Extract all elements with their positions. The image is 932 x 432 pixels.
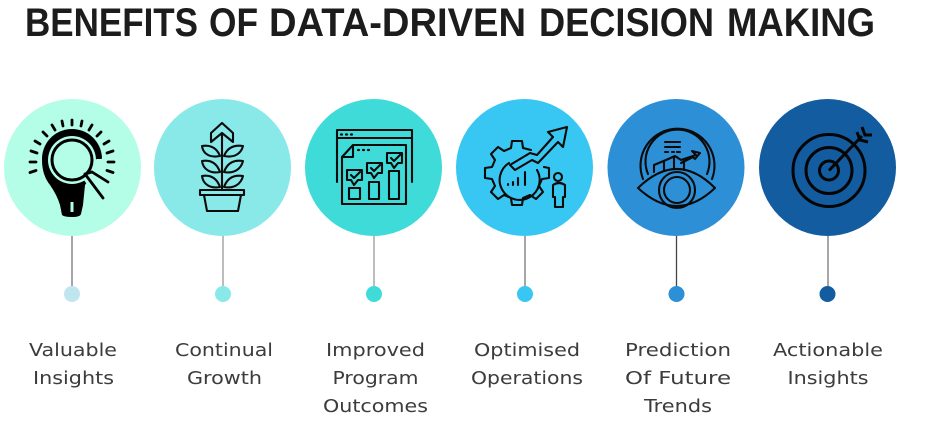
icon: target with arrow [793,127,872,206]
circle 6 [759,99,896,236]
label: prediction of future trends: Trends [643,397,712,417]
connector line 1 [71,236,73,286]
label: optimised operations: Optimised [474,341,580,361]
connector line 6 [827,236,829,286]
connector line 5 [676,236,678,286]
title: DATA-DRIVEN [269,1,526,45]
benefit: valuable insights [4,99,141,286]
label: prediction of future trends: Of Future [625,369,731,389]
benefit: actionable insights [759,99,896,286]
dot 3 [366,286,382,302]
label: optimised operations [471,341,583,389]
title [25,1,875,45]
icon: potted plant with arrow [200,123,244,211]
circle 1 [4,99,141,236]
label: optimised operations: Operations [471,369,583,389]
connector line 3 [373,236,375,286]
benefit: continual growth [154,99,291,286]
icon: report with bar chart and checks [337,130,412,204]
label: prediction of future trends [625,341,731,417]
label: continual growth: Growth [187,369,262,389]
label: valuable insights: Valuable [29,341,117,361]
circle 5 [608,99,744,236]
title: DECISION [539,1,714,45]
connector line 2 [222,236,224,286]
benefit: prediction of future trends [608,99,744,286]
label: continual growth: Continual [175,341,273,361]
label: actionable insights: Insights [788,369,868,389]
icon: eye with chart [638,129,715,208]
icon: gear with rising arrow and person [485,127,567,207]
circle 2 [154,99,291,236]
title: BENEFITS [25,1,198,45]
label: improved program outcomes: Program [332,369,418,389]
dot 2 [215,286,231,302]
title: OF [209,1,258,45]
dot 4 [517,286,533,302]
connector line 4 [524,236,526,286]
benefit: optimised operations [456,99,593,286]
label: valuable insights: Insights [33,369,114,389]
benefit: improved program outcomes [305,99,442,286]
label: continual growth [175,341,273,389]
label: improved program outcomes: Improved [326,341,425,361]
dot 1 [64,286,80,302]
label: prediction of future trends: Prediction [625,341,731,361]
dot 6 [820,286,836,302]
circle 3 [305,99,442,236]
label: improved program outcomes [323,341,428,417]
label: valuable insights [29,341,117,389]
dot 5 [668,286,684,302]
label: actionable insights: Actionable [773,341,883,361]
label: improved program outcomes: Outcomes [323,397,428,417]
title: MAKING [727,1,875,45]
circle 4 [456,99,593,236]
label: actionable insights [773,341,883,389]
icon: light bulb with magnifier [30,120,114,217]
